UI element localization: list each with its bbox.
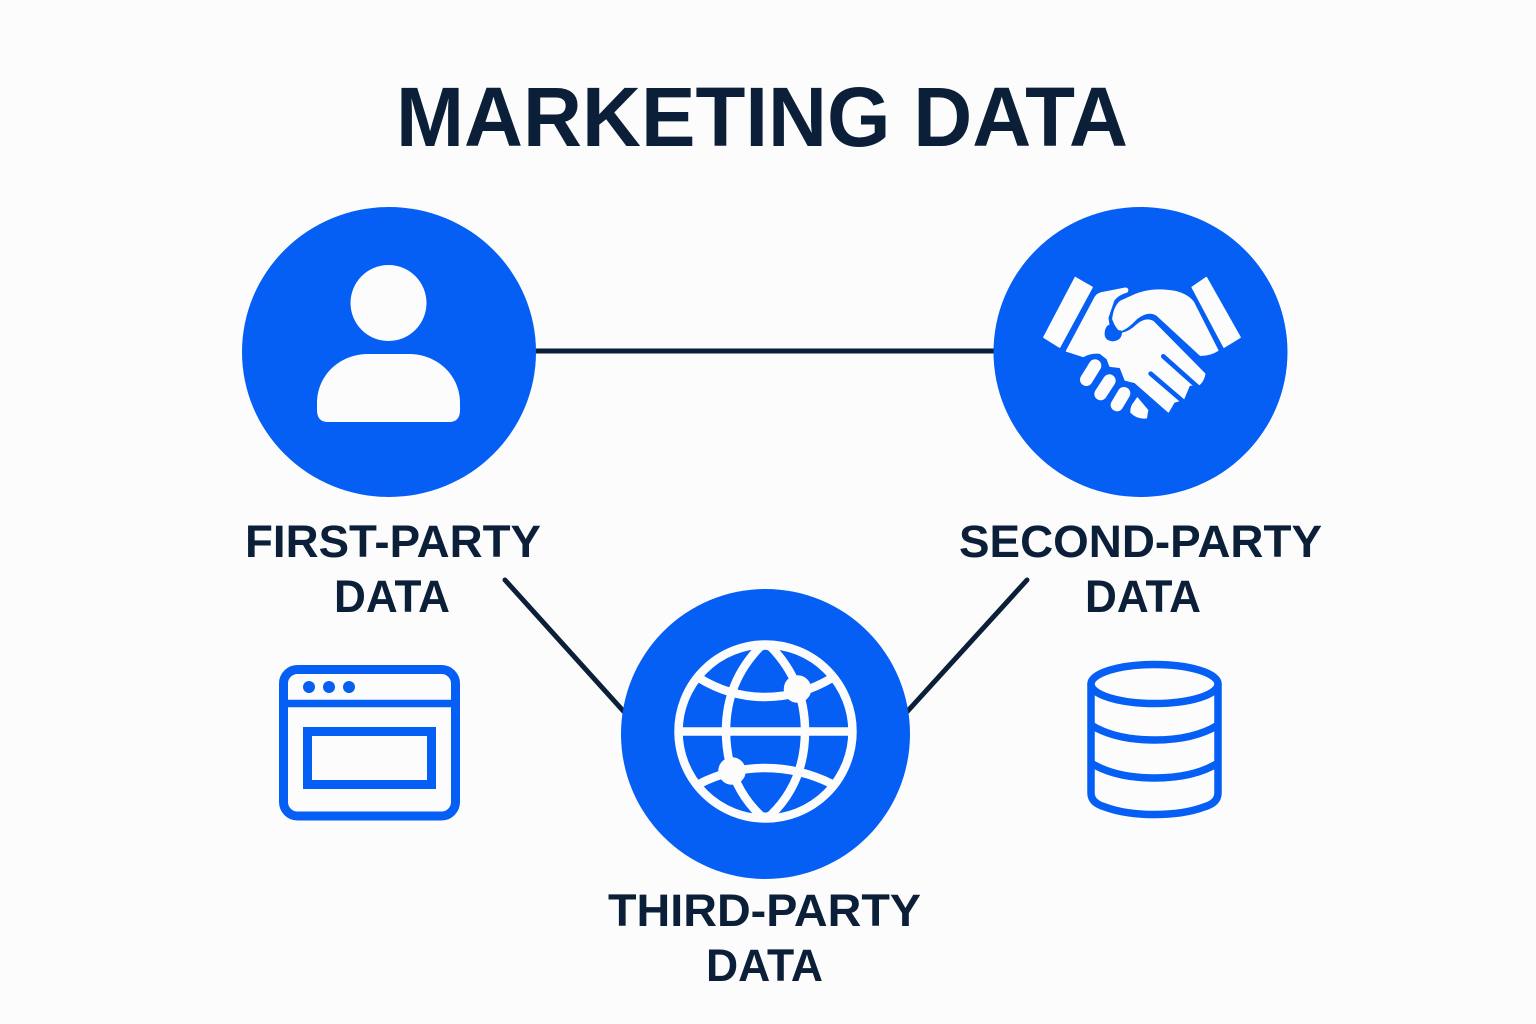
label: first-party data: DATA — [334, 571, 450, 622]
handshake little finger — [1130, 397, 1148, 419]
first-party circle with person icon — [242, 207, 536, 497]
label: third-party data — [608, 885, 921, 991]
connector: first-party to second-party — [530, 348, 1000, 354]
label: second-party data: DATA — [1085, 571, 1201, 622]
label: third-party data: DATA — [706, 940, 823, 991]
icon: browser window — [283, 670, 456, 816]
label: second-party data: SECOND-PARTY — [959, 516, 1322, 567]
third-party circle with globe icon — [621, 589, 910, 879]
handshake thumb knuckle — [1105, 325, 1122, 341]
icon: globe — [678, 644, 852, 818]
label: second-party data — [959, 516, 1322, 622]
connector: second-party to third-party — [905, 580, 1027, 714]
label: first-party data: FIRST-PARTY — [245, 516, 541, 567]
second-party circle with handshake icon — [994, 207, 1288, 497]
label: third-party data: THIRD-PARTY — [608, 885, 921, 936]
title: MARKETING DATA — [396, 70, 1128, 164]
icon: database cylinder — [1091, 664, 1218, 814]
handshake finger slits — [1151, 356, 1197, 402]
connector: first-party to third-party — [505, 580, 626, 714]
handshake finger pills — [1086, 366, 1124, 405]
icon: handshake — [1044, 278, 1240, 419]
label: first-party data — [245, 516, 541, 622]
icon: person — [317, 265, 460, 422]
